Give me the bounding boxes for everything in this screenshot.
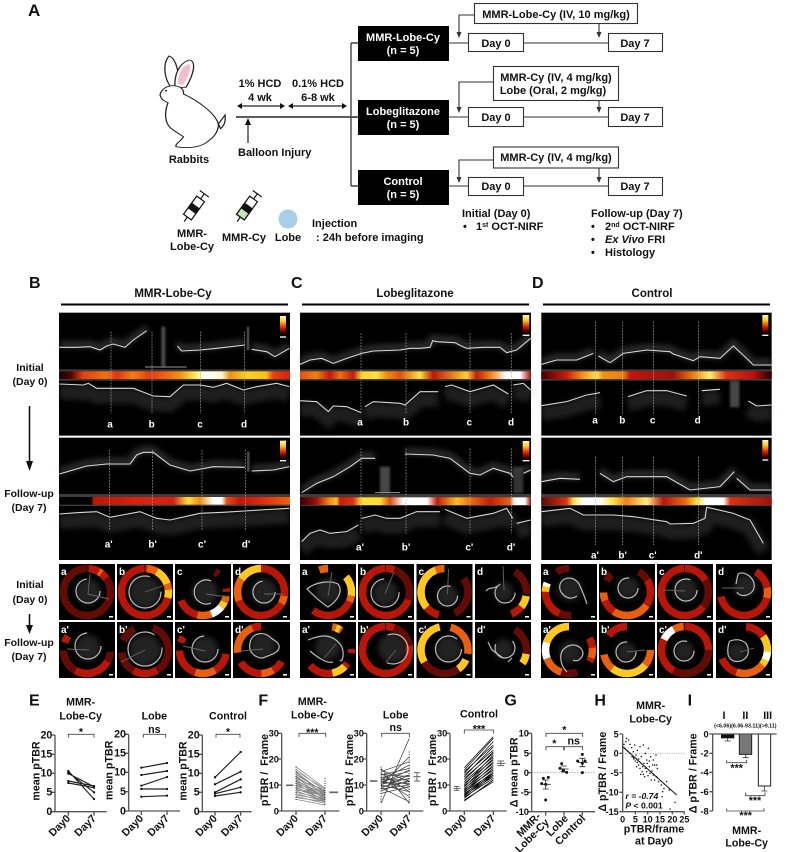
chart I: bar chart: -8 bbox=[700, 806, 709, 816]
thumbnail b: b bbox=[119, 567, 125, 578]
note: follow-up imaging: OCT-NIRF bbox=[620, 221, 675, 233]
thumbnail a: a bbox=[61, 567, 67, 578]
note: initial imaging: OCT-NIRF bbox=[488, 221, 544, 233]
group box: Control: Control bbox=[383, 176, 423, 188]
panel A: study design bbox=[28, 1, 683, 259]
chart H: correlation scatter: 10 bbox=[643, 815, 653, 825]
timeline: MMR-Lobe-Cy arm: Day 7 bbox=[620, 38, 650, 50]
timeline: MMR-Lobe-Cy arm: Day 0 bbox=[481, 38, 511, 50]
group box: Control: (n = 5) bbox=[387, 189, 420, 201]
panel letters E F: F bbox=[258, 693, 268, 710]
chart H: correlation scatter: P < 0.001 bbox=[625, 800, 663, 810]
chart E: Lobe: Day0 bbox=[120, 813, 146, 839]
chart E: MMR-Lobe-Cy: Lobe-Cy bbox=[59, 710, 102, 722]
panel C: OCT-NIRF longitudinal images: b bbox=[403, 417, 409, 428]
panel D: OCT-NIRF longitudinal images: b bbox=[619, 416, 625, 427]
panel C: cross-section thumbnails bbox=[300, 564, 531, 678]
panel C: OCT-NIRF longitudinal images: a bbox=[357, 417, 363, 428]
chart H: correlation scatter: 5 bbox=[614, 729, 619, 739]
icon: syringe MMR-Cy bbox=[233, 190, 262, 225]
panel B: cross-section thumbnails bbox=[59, 564, 290, 678]
chart E: Lobe: 10 bbox=[114, 767, 126, 779]
thumbnail a prime bbox=[541, 622, 597, 678]
chart E: MMR-Lobe-Cy: 5 bbox=[46, 787, 52, 799]
chart F: Lobe bbox=[344, 709, 423, 839]
panel letters E F: E bbox=[29, 693, 40, 710]
chart F: Lobe: 0 bbox=[359, 806, 364, 816]
chart E: Control: mean pTBR bbox=[177, 741, 189, 801]
chart F: MMR-Lobe-Cy: pTBR / Frame bbox=[259, 734, 271, 806]
chart G: delta mean pTBR: MMR- bbox=[514, 810, 544, 840]
diet timeline: 4 wk bbox=[248, 92, 273, 104]
chart F: Control: 10 bbox=[437, 780, 447, 790]
chart E: Lobe: ns bbox=[148, 724, 161, 736]
label: rabbits: Rabbits bbox=[169, 154, 209, 166]
thumbnail d: d bbox=[718, 567, 724, 578]
chart H: correlation scatter: 0 bbox=[620, 815, 625, 825]
thumbnail c prime bbox=[657, 622, 713, 678]
thumbnail d: d bbox=[235, 567, 241, 578]
chart F: Lobe: ns bbox=[389, 722, 402, 734]
thumbnail d prime: d' bbox=[477, 625, 486, 636]
panel B, C, D headings bbox=[29, 275, 770, 306]
note: initial imaging: st bbox=[482, 222, 489, 229]
chart F: MMR-Lobe-Cy bbox=[259, 696, 339, 839]
panel D: OCT-NIRF longitudinal images: d bbox=[695, 416, 701, 427]
chart I: bar chart: -6 bbox=[700, 787, 709, 797]
chart I: bar chart: 0 bbox=[703, 729, 709, 739]
chart H: correlation scatter: -5 bbox=[611, 768, 619, 778]
panel D: OCT-NIRF longitudinal images: a bbox=[592, 416, 598, 427]
timeline: Lobeglitazone arm bbox=[449, 66, 662, 126]
panel B, C, D headings: C bbox=[291, 275, 303, 292]
legend labels bbox=[170, 218, 424, 253]
note: follow-up imaging: 2 bbox=[605, 221, 611, 233]
thumbnail c: c bbox=[418, 567, 424, 578]
chart E: MMR-Lobe-Cy: mean pTBR bbox=[30, 741, 42, 801]
chart G: delta mean pTBR: 10 bbox=[519, 729, 529, 739]
note: follow-up imaging bbox=[591, 208, 683, 259]
group box: MMR-Lobe-Cy: (n = 5) bbox=[387, 45, 420, 57]
chart F: Lobe mean bbox=[413, 773, 421, 781]
thumbnail b prime: b' bbox=[601, 625, 610, 636]
chart E: Lobe: Lobe bbox=[142, 710, 167, 722]
thumbnail d prime: d' bbox=[235, 625, 244, 636]
chart H: correlation scatter: -10 bbox=[606, 788, 619, 798]
chart E: MMR-Lobe-Cy: 10 bbox=[40, 768, 52, 780]
timeline: MMR-Lobe-Cy arm: MMR-Lobe-Cy (IV, 10 mg/kg) bbox=[482, 9, 630, 21]
icon: rabbit bbox=[160, 56, 225, 148]
panel D: OCT-NIRF longitudinal images: d' bbox=[694, 551, 703, 562]
chart E: Control bbox=[177, 710, 252, 839]
chart H: correlation scatter: MMR- bbox=[636, 700, 666, 712]
note: initial imaging: 1 bbox=[476, 221, 482, 233]
panel D: cross-section thumbnails bbox=[541, 564, 772, 678]
timeline: MMR-Lobe-Cy arm bbox=[449, 4, 662, 52]
thumbnail a: a bbox=[302, 567, 308, 578]
chart I: bar chart: (<6.06)(6.06-93.11)(>9.11) bbox=[714, 724, 777, 730]
chart F: MMR-Lobe-Cy: 20 bbox=[269, 754, 279, 764]
panel B: OCT-NIRF longitudinal images: b bbox=[149, 420, 155, 431]
legend labels: : 24h before imaging bbox=[316, 232, 424, 244]
chart E: Lobe: 0 bbox=[120, 805, 126, 817]
thumbnail a prime: a' bbox=[543, 625, 551, 636]
panel C: OCT-NIRF longitudinal images: d' bbox=[507, 543, 515, 554]
panels F, G, H, I: right charts bbox=[413, 693, 777, 852]
legend labels: MMR- bbox=[177, 228, 207, 240]
chart H: correlation scatter: -15 bbox=[606, 807, 619, 817]
chart I: bar chart: *** bbox=[749, 795, 762, 807]
chart E: Control: 20 bbox=[188, 729, 200, 741]
panel C: OCT-NIRF longitudinal images bbox=[300, 313, 531, 560]
timeline: Control arm: Day 7 bbox=[620, 181, 650, 193]
row labels left: Initial bbox=[16, 362, 44, 374]
icon: syringe MMR-Lobe-Cy bbox=[180, 190, 209, 225]
panel D: OCT-NIRF longitudinal images: c bbox=[650, 416, 656, 427]
chart F: Control: 30 bbox=[437, 729, 447, 739]
chart F: MMR-Lobe-Cy: Day0 bbox=[274, 813, 301, 839]
chart F: Control: Control bbox=[460, 709, 498, 721]
chart F: MMR-Lobe-Cy: 30 bbox=[269, 729, 279, 739]
timeline: Control arm: MMR-Cy (IV, 4 mg/kg) bbox=[500, 152, 612, 164]
thumbnail d bbox=[475, 564, 531, 620]
timeline: Control arm: Day 0 bbox=[481, 181, 511, 193]
timeline: Lobeglitazone arm: Day 0 bbox=[481, 112, 511, 124]
thumbnail a prime bbox=[300, 622, 356, 678]
chart E: Control: * bbox=[226, 727, 231, 739]
thumbnail b prime: b' bbox=[360, 625, 368, 636]
thumbnail c: c bbox=[659, 567, 665, 578]
chart I: bar chart: I bbox=[688, 693, 692, 710]
panel B: OCT-NIRF longitudinal images bbox=[59, 313, 290, 560]
thumbnail b bbox=[117, 564, 173, 620]
note: follow-up imaging: Histology bbox=[605, 247, 656, 259]
chart H: correlation scatter: at Day0 bbox=[635, 836, 673, 848]
chart F: Control: Day7 bbox=[472, 813, 498, 839]
chart E: Lobe: mean pTBR bbox=[104, 740, 116, 800]
panel C: OCT-NIRF longitudinal images: b' bbox=[402, 543, 410, 554]
chart I: bar chart: *** bbox=[739, 810, 753, 822]
chart I: bar chart bbox=[688, 693, 777, 850]
chart E: Lobe: 15 bbox=[114, 748, 126, 760]
chart E: Lobe: Day7 bbox=[145, 813, 172, 839]
note: follow-up imaging: • bbox=[591, 221, 595, 233]
row labels left: Follow-up bbox=[4, 637, 54, 649]
chart E: Control: 10 bbox=[188, 768, 200, 780]
chart I: bar chart: *** bbox=[730, 763, 744, 775]
row labels left: (Day 7) bbox=[11, 502, 47, 514]
thumbnail b prime: b' bbox=[119, 625, 128, 636]
chart H: correlation scatter: 15 bbox=[655, 815, 665, 825]
thumbnail c: c bbox=[177, 567, 183, 578]
timeline: Lobeglitazone arm: Day 7 bbox=[620, 112, 650, 124]
chart H: correlation scatter: pTBR/frame bbox=[624, 824, 684, 836]
diet timeline: 1% HCD bbox=[239, 78, 281, 90]
row labels left: Follow-up bbox=[4, 488, 54, 500]
thumbnail b prime bbox=[358, 622, 414, 678]
chart I: bar chart: II bbox=[742, 710, 748, 722]
chart G: delta mean pTBR: Lobe bbox=[544, 813, 571, 839]
timeline: Lobeglitazone arm: MMR-Cy (IV, 4 mg/kg) bbox=[500, 72, 612, 84]
chart F: Lobe: 10 bbox=[354, 780, 364, 790]
thumbnail a: a bbox=[543, 567, 549, 578]
thumbnail b: b bbox=[360, 567, 366, 578]
chart E: MMR-Lobe-Cy: MMR- bbox=[66, 697, 96, 709]
thumbnail c bbox=[657, 564, 713, 620]
chart E: Control: 15 bbox=[188, 749, 200, 761]
chart G: delta mean pTBR: G bbox=[504, 693, 517, 710]
panel B, C, D headings: B bbox=[29, 275, 41, 292]
thumbnail a prime: a' bbox=[302, 625, 310, 636]
chart F: Lobe: Lobe bbox=[383, 709, 408, 721]
chart H: correlation scatter: 25 bbox=[679, 815, 689, 825]
group box: Lobeglitazone: Lobeglitazone bbox=[366, 106, 440, 118]
chart E: Control: Day0 bbox=[193, 813, 220, 839]
chart F: Control: 20 bbox=[437, 754, 447, 764]
chart I: bar chart: Δ pTBR / Frame bbox=[688, 733, 700, 813]
chart H: correlation scatter: 0 bbox=[614, 749, 619, 759]
chart F: Control bbox=[427, 709, 507, 839]
thumbnail d prime bbox=[233, 622, 290, 678]
chart H: correlation scatter: Lobe-Cy bbox=[629, 713, 672, 725]
panel B: OCT-NIRF longitudinal images: d bbox=[241, 420, 247, 431]
chart H: correlation scatter: H bbox=[594, 693, 606, 710]
panel B: OCT-NIRF longitudinal images: c' bbox=[198, 539, 206, 550]
chart H: correlation scatter: 5 bbox=[633, 815, 638, 825]
panel letters E F bbox=[29, 693, 268, 710]
diet timeline bbox=[236, 43, 358, 186]
group box: Control bbox=[358, 170, 449, 205]
arrow: balloon injury: Balloon Injury bbox=[238, 147, 312, 159]
chart E: Lobe: 5 bbox=[120, 786, 126, 798]
arrow: balloon injury bbox=[238, 118, 312, 159]
legend labels: Injection bbox=[312, 218, 358, 230]
note: initial imaging: Initial (Day 0) bbox=[462, 208, 531, 220]
chart F: Lobe: 30 bbox=[354, 729, 364, 739]
chart F: MMR-Lobe-Cy: 10 bbox=[269, 780, 279, 790]
chart G: delta mean pTBR: -10 bbox=[516, 807, 529, 817]
group box: MMR-Lobe-Cy bbox=[358, 26, 449, 61]
thumbnail d bbox=[233, 564, 290, 620]
row labels left: (Day 7) bbox=[11, 651, 47, 663]
chart E: Control: Control bbox=[209, 710, 247, 722]
chart E: MMR-Lobe-Cy: 15 bbox=[40, 749, 52, 761]
thumbnail b bbox=[599, 564, 655, 620]
panel B: OCT-NIRF longitudinal images: d' bbox=[242, 539, 250, 550]
thumbnail a bbox=[300, 564, 356, 620]
chart E: Lobe: 20 bbox=[114, 729, 126, 741]
chart H: correlation scatter: 20 bbox=[667, 815, 677, 825]
chart G: delta mean pTBR: Δ mean pTBR bbox=[509, 737, 521, 807]
note: follow-up imaging: Follow-up (Day 7) bbox=[591, 208, 683, 220]
chart I: bar chart: Lobe-Cy bbox=[725, 838, 768, 850]
panel B, C, D headings: Control bbox=[632, 288, 672, 300]
diet timeline: 0.1% HCD bbox=[292, 78, 344, 90]
panel D: OCT-NIRF longitudinal images: b' bbox=[618, 551, 627, 562]
chart H: correlation scatter: r = -0.74 bbox=[625, 791, 658, 801]
chart E: MMR-Lobe-Cy: Day0 bbox=[47, 813, 73, 839]
chart F: Lobe: pTBR / Frame bbox=[344, 734, 356, 806]
chart F: Control: Day0 bbox=[443, 813, 469, 839]
chart E: MMR-Lobe-Cy bbox=[30, 697, 107, 839]
chart I: bar chart: -2 bbox=[700, 749, 709, 759]
chart E: Lobe bbox=[104, 710, 180, 839]
panel D: OCT-NIRF longitudinal images: a' bbox=[591, 551, 599, 562]
timeline: Control arm bbox=[449, 147, 662, 196]
thumbnail d: d bbox=[477, 567, 483, 578]
legend labels: Lobe bbox=[275, 232, 301, 244]
thumbnail c prime: c' bbox=[659, 625, 667, 636]
panel C: OCT-NIRF longitudinal images: a' bbox=[356, 543, 364, 554]
note: initial imaging bbox=[462, 208, 544, 233]
chart F: MMR-Lobe-Cy: MMR- bbox=[298, 696, 327, 708]
row labels left: Initial bbox=[16, 579, 44, 591]
chart F: MMR-Lobe-Cy: 0 bbox=[274, 806, 279, 816]
thumbnail c prime: c' bbox=[177, 625, 185, 636]
chart F: Control: *** bbox=[473, 724, 486, 736]
thumbnail c bbox=[175, 564, 231, 620]
chart I: bar chart: III bbox=[763, 710, 772, 722]
row labels left: (Day 0) bbox=[12, 594, 48, 606]
note: initial imaging: • bbox=[463, 221, 467, 233]
panel letter A: A bbox=[28, 1, 40, 20]
chart H: correlation scatter bbox=[594, 693, 689, 848]
chart F: Control: 0 bbox=[442, 806, 447, 816]
chart I: bar chart: -4 bbox=[700, 768, 709, 778]
panel B: OCT-NIRF longitudinal images: a' bbox=[105, 539, 113, 550]
chart I: bar chart: I bbox=[723, 710, 726, 722]
chart I: bar chart: MMR- bbox=[732, 825, 762, 837]
row labels left: (Day 0) bbox=[12, 376, 48, 388]
thumbnail a prime bbox=[59, 622, 115, 678]
thumbnail c prime bbox=[416, 622, 472, 678]
chart E: Control: 5 bbox=[194, 787, 200, 799]
legend labels: Lobe-Cy bbox=[170, 241, 215, 253]
chart G: delta mean pTBR: ns bbox=[567, 735, 580, 747]
chart F: Control: pTBR / Frame bbox=[427, 734, 439, 806]
chart F: Lobe: Day7 bbox=[388, 813, 414, 839]
panels E and F: line charts bbox=[29, 693, 423, 839]
panel B, C, D headings: D bbox=[532, 275, 544, 292]
thumbnail a bbox=[541, 564, 597, 620]
panel C: OCT-NIRF longitudinal images: c' bbox=[465, 543, 473, 554]
chart G: delta mean pTBR: 0 bbox=[524, 768, 529, 778]
chart F: Lobe: 20 bbox=[354, 754, 364, 764]
thumbnail a prime: a' bbox=[61, 625, 69, 636]
chart F: Lobe: Day0 bbox=[359, 813, 386, 839]
thumbnail b: b bbox=[601, 567, 607, 578]
thumbnail b prime bbox=[117, 622, 173, 678]
note: follow-up imaging: • bbox=[591, 247, 595, 259]
thumbnail c prime: c' bbox=[418, 625, 426, 636]
thumbnail d bbox=[716, 564, 772, 620]
panel B: OCT-NIRF longitudinal images: b' bbox=[148, 539, 157, 550]
chart G: delta mean pTBR: * bbox=[562, 725, 567, 737]
diet timeline: 6-8 wk bbox=[301, 92, 336, 104]
thumbnail a bbox=[59, 564, 115, 620]
chart G: delta mean pTBR bbox=[504, 693, 595, 852]
note: follow-up imaging: • bbox=[591, 234, 595, 246]
thumbnail b bbox=[358, 564, 414, 620]
thumbnail d prime bbox=[475, 622, 531, 678]
chart E: MMR-Lobe-Cy: 0 bbox=[46, 806, 52, 818]
thumbnail c bbox=[416, 564, 472, 620]
chart E: Control: Day7 bbox=[219, 813, 245, 839]
chart G: delta mean pTBR: * bbox=[552, 738, 557, 750]
chart G: delta mean pTBR: 5 bbox=[524, 749, 529, 759]
group box: MMR-Lobe-Cy: MMR-Lobe-Cy bbox=[366, 32, 441, 44]
group box: Lobeglitazone bbox=[358, 100, 449, 135]
chart H: correlation scatter: Δ pTBR / Frame bbox=[597, 732, 609, 812]
chart F: MMR-Lobe-Cy: Day7 bbox=[303, 813, 330, 839]
thumbnail d prime bbox=[716, 622, 772, 678]
chart E: Control: 0 bbox=[194, 806, 200, 818]
timeline: Lobeglitazone arm: Lobe (Oral, 2 mg/kg) bbox=[500, 85, 607, 97]
panel C: OCT-NIRF longitudinal images: c bbox=[467, 417, 473, 428]
note: follow-up imaging: Ex Vivo FRI bbox=[605, 234, 665, 246]
thumbnail d prime: d' bbox=[718, 625, 726, 636]
note: follow-up imaging: nd bbox=[611, 222, 620, 229]
panel B, C, D headings: MMR-Lobe-Cy bbox=[134, 288, 212, 300]
panel B: OCT-NIRF longitudinal images: a bbox=[107, 420, 113, 431]
icon: lobe tablet bbox=[278, 210, 298, 228]
group box: Lobeglitazone: (n = 5) bbox=[387, 119, 420, 131]
chart G: delta mean pTBR: -5 bbox=[521, 788, 529, 798]
panel D: OCT-NIRF longitudinal images bbox=[541, 313, 772, 562]
chart F: MMR-Lobe-Cy: Lobe-Cy bbox=[291, 709, 334, 721]
panel B, C, D headings: Lobeglitazone bbox=[376, 288, 454, 300]
thumbnail c prime bbox=[175, 622, 231, 678]
panel B: OCT-NIRF longitudinal images: c bbox=[197, 420, 203, 431]
chart E: MMR-Lobe-Cy: 20 bbox=[40, 729, 52, 741]
panel C: OCT-NIRF longitudinal images: d bbox=[508, 417, 514, 428]
chart E: MMR-Lobe-Cy: * bbox=[79, 727, 84, 739]
row labels left bbox=[4, 362, 54, 663]
legend labels: MMR-Cy bbox=[222, 232, 267, 244]
panel D: OCT-NIRF longitudinal images: c' bbox=[649, 551, 657, 562]
chart E: MMR-Lobe-Cy: Day7 bbox=[72, 813, 99, 839]
chart G: delta mean pTBR: Control bbox=[553, 813, 588, 848]
thumbnail b prime bbox=[599, 622, 655, 678]
chart F: MMR-Lobe-Cy: *** bbox=[306, 727, 319, 739]
